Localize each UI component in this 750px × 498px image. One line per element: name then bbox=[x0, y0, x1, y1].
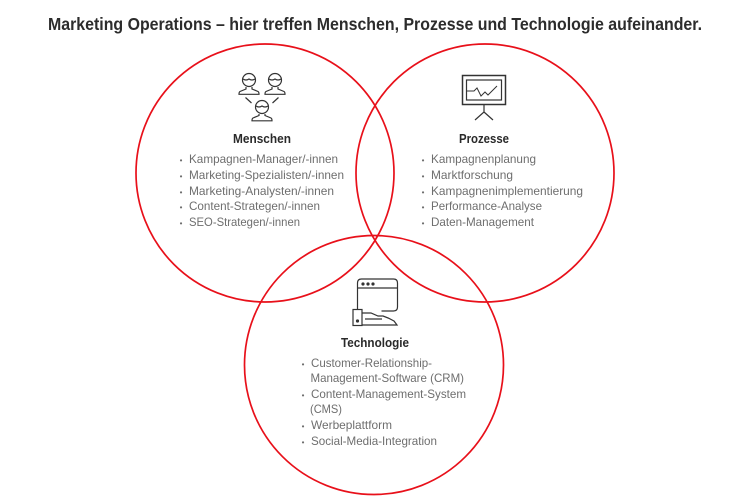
list: Technologie items: Social-Media-Integration bbox=[311, 434, 437, 448]
panel: Menschen bbox=[180, 74, 344, 229]
list: Menschen roles: • bbox=[180, 203, 183, 212]
list: Menschen roles: SEO-Strategen/-innen bbox=[189, 215, 300, 229]
list: Menschen roles: • bbox=[180, 219, 183, 228]
list: Menschen roles: Content-Strategen/-innen bbox=[189, 199, 320, 213]
list: Technologie items: • bbox=[302, 438, 305, 447]
list: Prozesse items: Kampagnenimplementierung bbox=[431, 184, 583, 198]
icon: presentation board bbox=[462, 76, 506, 120]
list: Technologie items bbox=[302, 356, 466, 448]
list: Prozesse items: • bbox=[422, 156, 425, 165]
list: Technologie items: • bbox=[302, 422, 305, 431]
heading: Technologie: Technologie bbox=[341, 336, 409, 350]
list: Prozesse items: Kampagnenplanung bbox=[431, 152, 536, 166]
venn diagram circles bbox=[136, 44, 614, 494]
list: Prozesse items: Performance-Analyse bbox=[431, 199, 542, 213]
title: Marketing Operations – hier treffen Menschen, Prozesse und Technologie aufeinander. bbox=[48, 14, 702, 34]
icon: people bbox=[239, 74, 285, 121]
list: Technologie items: Management-Software (CRM) bbox=[310, 371, 464, 385]
list: Technologie items: • bbox=[302, 391, 305, 400]
list: Menschen roles: • bbox=[180, 156, 183, 165]
list: Menschen roles: Marketing-Analysten/-innen bbox=[189, 184, 334, 198]
icon: browser window and hand bbox=[353, 279, 398, 326]
list: Prozesse items: • bbox=[422, 219, 425, 228]
panel: Technologie bbox=[302, 279, 466, 448]
list: Prozesse items: • bbox=[422, 203, 425, 212]
list: Technologie items: • bbox=[302, 360, 305, 369]
list: Technologie items: Werbeplattform bbox=[311, 418, 392, 432]
list: Technologie items: (CMS) bbox=[310, 402, 342, 416]
list: Menschen roles bbox=[180, 152, 344, 229]
list: Menschen roles: Kampagnen-Manager/-innen bbox=[189, 152, 338, 166]
list: Prozesse items bbox=[422, 152, 583, 229]
list: Technologie items: Content-Management-System bbox=[311, 387, 466, 401]
list: Prozesse items: • bbox=[422, 188, 425, 197]
list: Technologie items: Customer-Relationship- bbox=[311, 356, 432, 370]
panel: Prozesse bbox=[422, 76, 583, 229]
list: Prozesse items: Marktforschung bbox=[431, 168, 513, 182]
list: Prozesse items: • bbox=[422, 172, 425, 181]
heading: Menschen: Menschen bbox=[233, 132, 291, 146]
list: Prozesse items: Daten-Management bbox=[431, 215, 535, 229]
list: Menschen roles: Marketing-Spezialisten/-innen bbox=[189, 168, 344, 182]
list: Menschen roles: • bbox=[180, 188, 183, 197]
heading: Prozesse: Prozesse bbox=[459, 132, 509, 146]
list: Menschen roles: • bbox=[180, 172, 183, 181]
